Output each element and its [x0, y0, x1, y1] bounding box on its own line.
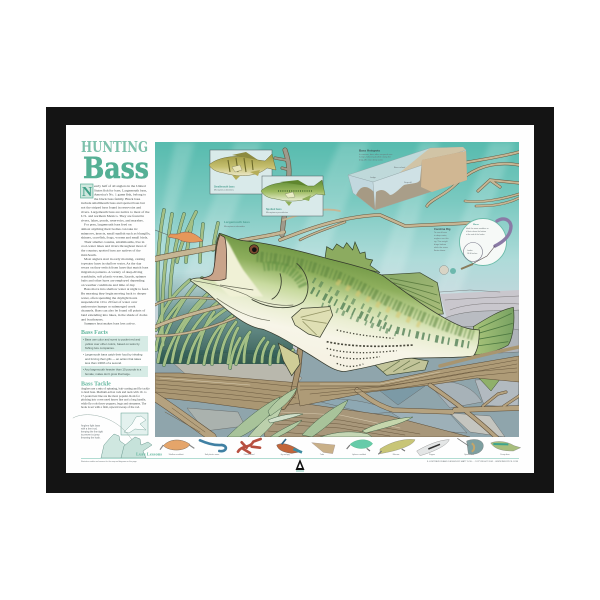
diagram: carolina rig: it floats above the bottom	[466, 230, 487, 233]
lure: plastic lizard	[238, 439, 261, 453]
lure row	[160, 438, 521, 456]
bed cracks	[440, 290, 519, 310]
ventral fin	[278, 343, 300, 376]
tackle text: pitching into cover need heavy line and a long handle,	[81, 398, 146, 403]
label: largemouth bass: Micropterus salmoides	[224, 225, 245, 228]
panel: spotted bass	[261, 176, 325, 216]
left log	[155, 373, 300, 410]
article text: For prey, largemouth bass feed on	[84, 223, 132, 228]
belly dots	[327, 330, 413, 366]
article text: not the striped bass found in reservoirs and	[81, 206, 141, 210]
fact list text: yellow over other colors, based on tests by	[85, 342, 140, 346]
title line: Bass: Bass	[83, 151, 149, 185]
article text: rivers, lakes, ponds, reservoirs, and marshes.	[81, 218, 144, 223]
mouth	[201, 235, 227, 281]
footer rule	[81, 457, 519, 460]
diagram: carolina rig: Leader	[467, 250, 473, 252]
lure: jig	[277, 439, 302, 453]
foreground leaves	[227, 388, 413, 437]
framed poster	[46, 107, 554, 493]
hotspots text: Bass school	[394, 167, 406, 169]
tackle text: while fly rods throw poppers, bugs and streamers. The	[81, 401, 147, 406]
tackle caption: with a bent rod,	[81, 428, 98, 430]
rig text: in deep water,	[434, 234, 447, 237]
tackle caption: throwing the hook.	[81, 436, 101, 440]
article text: the black bass family. Black bass	[94, 197, 141, 201]
lure: lipless crankbait	[347, 440, 373, 451]
jaw shading lines	[193, 281, 293, 321]
tackle caption: keeping the line tight	[81, 430, 103, 434]
article text: baits and other lures are employed depending	[81, 279, 145, 283]
title	[81, 138, 149, 185]
hotspots text: Drop-off	[404, 181, 412, 184]
lure labels: Shallow crankbait	[169, 453, 184, 456]
article text: mid-South.	[81, 253, 97, 257]
footer credits left: Illustration credits and sources for the map and diagrams on this page.	[81, 460, 138, 463]
article text: Most anglers start in early morning, casting	[84, 257, 145, 262]
front face	[373, 150, 467, 210]
wood grain	[156, 360, 517, 436]
lure labels: Lipless crankbait	[352, 453, 367, 456]
soft dorsal fin	[380, 273, 443, 315]
publisher logo	[296, 459, 304, 472]
article text: minnows, insects, small sunfish such as bluegills,	[81, 231, 150, 236]
tackle caption: to prevent a jump	[81, 434, 100, 436]
fact list text: • Bass use color and scent to pocket red and	[83, 338, 141, 342]
article text: shiners, crawfish, frogs, worms and small birds.	[81, 236, 148, 241]
back mottling	[257, 257, 473, 335]
left end face	[348, 175, 375, 210]
main log	[296, 356, 519, 406]
side branches	[155, 385, 519, 438]
rig text: rig. The weight	[434, 240, 448, 243]
article text: almost anything their bodies can take in:	[81, 227, 138, 231]
lure labels: Minnow	[393, 454, 400, 456]
article text: America's No. 1 game fish, belong to	[94, 193, 146, 198]
hotspots text: drop-offs near deep water.	[359, 158, 384, 161]
panel: smallmouth bass: Smallmouth bass	[214, 186, 235, 188]
chart: bass hotspots cutaway	[348, 147, 467, 210]
article text: cool-water lakes and rivers throughout most of	[81, 244, 147, 248]
heading: Bass Tackle: Bass Tackle	[81, 382, 111, 388]
grass shadow	[158, 272, 293, 364]
diagram: carolina rig	[440, 218, 511, 274]
light rays	[155, 142, 515, 320]
label: largemouth bass	[224, 221, 250, 228]
pectoral fin	[292, 307, 333, 337]
article text: Bass move into shallow water at night to feed.	[84, 287, 149, 291]
lure labels: Tube	[320, 454, 324, 456]
tackle text: hook is set with a firm, upward sweep of the rod.	[81, 405, 140, 410]
hotspots text: humps, following baitfish along the	[359, 156, 392, 159]
diagram: carolina rig: Hook the worm weedless so	[466, 227, 488, 230]
logs	[155, 350, 519, 438]
lower tail lobe	[479, 378, 500, 391]
white poster mat	[66, 125, 534, 473]
river-bed stones	[155, 290, 519, 437]
article text: the country; spotted bass are natives of the	[81, 248, 141, 252]
fact list text: and forcing their gills — an action that takes	[85, 357, 142, 361]
fact list text: • Any largemouth heavier than 10 pounds is a	[83, 368, 142, 372]
tackle text: 17-pound test line are the most popular. Rods for	[81, 394, 140, 398]
lure labels	[169, 453, 510, 456]
article text: include smallmouth bass and spotted bass but	[81, 201, 145, 205]
fact box 1	[81, 336, 148, 352]
article text: water, often spending the daylight hours	[81, 296, 138, 301]
illustration: hook-set inset	[121, 413, 148, 435]
root	[283, 350, 300, 407]
hotspots text: Ledge	[370, 177, 377, 179]
article text: wears on they switch from lures that match bass	[81, 266, 149, 270]
lure: plastic worm	[200, 440, 226, 451]
lure: minnow plug	[378, 439, 415, 454]
tail fin	[473, 307, 514, 355]
icon: smallmouth fish	[209, 152, 276, 180]
article text: underwater humps or submerged creek	[81, 304, 136, 308]
rig text: Carolina Rig	[434, 227, 451, 231]
panel: smallmouth bass	[209, 150, 276, 194]
icon: spotted fish	[261, 180, 325, 206]
anal fin	[375, 357, 428, 375]
black picture frame	[46, 107, 554, 493]
article text	[81, 184, 150, 326]
lure labels: Popper	[429, 453, 435, 456]
tackle caption	[81, 424, 103, 440]
article text: topwater lures in shallow water. As the day	[81, 261, 142, 265]
lure labels: Plastic lizard	[244, 453, 254, 456]
article text: early half of all anglers in the United	[94, 184, 146, 188]
water grass	[156, 210, 293, 368]
tackle text: Anglers use a mix of spinning, bait-casting and fly tackle	[81, 386, 150, 392]
diagram: carolina rig: at the end of the leader	[466, 233, 485, 236]
water background	[155, 142, 519, 350]
article text: suspended in 10 to 20 feet of water over	[81, 300, 138, 304]
rig text	[434, 227, 451, 252]
rig text: anglers use this	[434, 237, 449, 240]
footer credits right: ILLUSTRATION AND DESIGN BY MATT DOLL · COPYRIGHT 2005 · WWW.INFOPICS.COM	[427, 460, 519, 463]
title line: Hunting: HUNTING	[81, 138, 148, 156]
fact list text: fishing lure companies.	[85, 346, 115, 350]
weights	[440, 266, 448, 274]
article text: crankbaits, soft plastic worms, lizards, spinner	[81, 274, 147, 279]
label: largemouth bass: Largemouth bass	[224, 220, 250, 224]
gill cover	[252, 263, 308, 308]
illustration: anglers with fishing rod	[73, 415, 152, 458]
tackle text	[81, 386, 150, 410]
fact list text	[83, 338, 143, 376]
rig text: drags bottom	[434, 243, 446, 246]
lure labels: Spinnerbait	[464, 453, 474, 456]
fish body	[190, 233, 479, 372]
hotspots text: Bass Hotspots	[359, 148, 380, 152]
article text: U.S. and northern Mexico. They are found in	[81, 214, 144, 218]
rig text: To reach bass	[434, 231, 447, 234]
article text: States fish for bass. Largemouth bass,	[94, 188, 147, 193]
tackle text: to land bass. Medium-action rods and reels with 10- to	[81, 390, 147, 394]
panel: bass facts	[81, 336, 148, 377]
article text: on weather conditions and time of day.	[81, 283, 135, 287]
hotspots text	[359, 148, 412, 184]
lure: crankbait	[160, 440, 194, 450]
article text: channels. Bass can also be found off points of	[81, 309, 146, 313]
panel: spotted bass: Micropterus punctulatus	[266, 211, 288, 214]
pale head and jaw	[213, 238, 263, 297]
article text: and boathouses.	[81, 317, 103, 321]
panel: spotted bass: Spotted bass	[266, 208, 282, 211]
small baitfish	[155, 230, 203, 242]
lure: popper	[491, 441, 521, 451]
diagram: carolina rig: 18-30 inches	[467, 253, 477, 255]
eye	[249, 245, 259, 254]
top face	[348, 147, 466, 182]
fact list text: female; males don't grow that large.	[85, 372, 131, 376]
tackle caption: Anglers fight bass	[81, 424, 101, 428]
heading: Bass Facts: Bass Facts	[81, 330, 108, 336]
heading: Lure Lessons: Lure Lessons	[136, 452, 162, 456]
main illustration panel	[155, 142, 519, 438]
article text: Their smaller cousins, smallmouths, live in	[84, 240, 145, 245]
article text: rivers. Largemouth bass are native to most of the	[81, 210, 150, 214]
side blotches	[312, 290, 470, 345]
diagram: carolina rig: Worm	[473, 223, 479, 226]
lower log	[260, 403, 470, 437]
largemouth bass	[190, 233, 514, 376]
background branches	[155, 150, 519, 336]
article text: land extending into lakes, in the shade of docks	[81, 313, 148, 318]
body markings	[193, 238, 473, 366]
dorsal spiny fin	[325, 242, 380, 273]
terrain section	[375, 151, 467, 210]
front branch over the tail	[440, 347, 519, 366]
article text: Summer heat makes bass less active.	[84, 322, 136, 326]
lure: tube bait	[312, 443, 335, 454]
article text: By morning they begin moving back to deeper	[81, 292, 147, 296]
fact list text: • Largemouth bass catch their food by inhaling	[83, 352, 143, 356]
fact box 3	[81, 366, 148, 377]
hotspots text: In summer, bass often suspend over	[359, 153, 393, 156]
lure labels: Jig and pig	[280, 454, 290, 456]
drop cap: N	[82, 185, 92, 200]
rig text: floats above.	[434, 249, 446, 252]
panel: smallmouth bass: Micropterus dolomieu	[214, 188, 235, 192]
lure labels: Soft plastic worm	[205, 453, 220, 456]
lure: spinner bait	[457, 438, 483, 454]
lure labels: Deep diver	[500, 453, 510, 456]
lure: silver plug	[417, 440, 449, 456]
article text: migration patterns. A variety of deep-diving	[81, 270, 143, 274]
fact list text: less than 1/30th of a second.	[85, 361, 122, 365]
rig text: while the worm	[434, 246, 448, 249]
